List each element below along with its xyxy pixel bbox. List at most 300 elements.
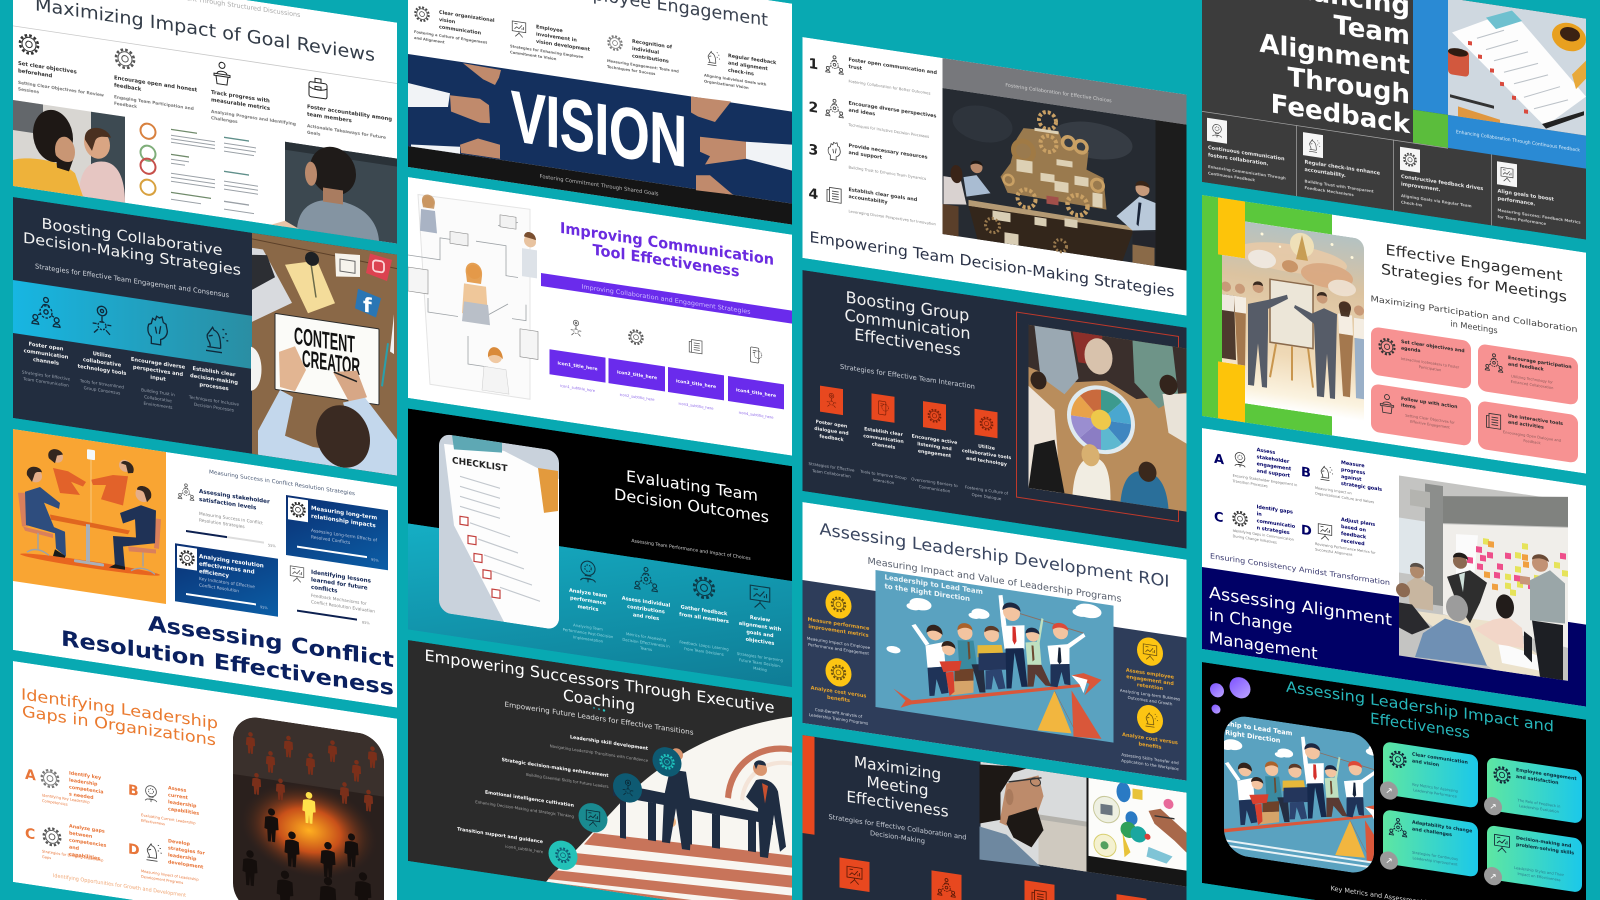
panel: Boosting Group Communication Effectiveness [802,270,1186,549]
column subtitles: Overcoming Barriers to [911,476,958,488]
box titles: icon4_title_here [736,387,776,399]
item B: Evaluating Current Leadership [141,813,196,825]
item C: Identify gaps [1257,504,1293,516]
column subtitles [22,370,239,412]
item A: Ensuring Stakeholder Engagement in [1233,474,1297,487]
item C: Identifying Gaps in Communication [1233,529,1294,542]
step subtitles: Enhancing Decision-Making and Strategic Thinking [475,799,575,819]
panel: Identifying Leadership Gaps [13,661,397,900]
column subtitles: Environments [144,401,172,410]
title: Feedback [1271,89,1411,140]
subtitle: Strategies for Effective Team Interaction [840,363,975,391]
teal band [13,280,252,369]
item 1 [18,34,104,96]
item D: received [1341,538,1365,547]
column titles: processes [199,382,229,392]
left metric 1: improvement metrics [808,624,869,639]
item A: leadership [69,777,98,788]
item 4 [704,49,777,94]
item 2 [114,48,197,110]
column subtitles: Feedback Loops: Learning [679,639,729,652]
pink card 2 [1478,343,1578,405]
item 2 [510,20,590,60]
title: Empowering Successors Through Executive [424,647,775,717]
colour blocks [1202,195,1332,435]
item C: Gaps [42,855,51,860]
column titles: communication [24,348,69,361]
column titles: Establish clear [193,366,236,378]
item A: Transition Processes [1232,479,1268,488]
item 4: Organizational Vision [704,79,749,90]
pink card 4: Encouraging Open Dialogue and [1503,430,1561,443]
title: Tool Effectiveness [593,241,740,281]
title: Maximizing [854,753,941,784]
icon tiles [1207,118,1517,187]
item 2: involvement in [536,32,577,44]
illustration: executives on stairs [546,680,792,900]
sketch: workflow of people [408,191,538,400]
tile: resolution effectiveness [175,543,278,617]
photo: festive team with easel [1221,218,1364,421]
list item 3: 3 [809,142,818,159]
purple band [541,273,792,324]
item 3: Recognition of [632,39,673,51]
column subtitles: Fostering a Culture of [965,484,1009,496]
title: Assessing Alignment [1209,583,1393,630]
title: Resolution Effectiveness [61,625,394,700]
left metric 2: benefits [827,695,850,704]
item D: based on [1341,524,1367,534]
column titles: input [150,375,166,383]
step labels: Transition support and guidance [457,826,543,845]
title: Alignment [1259,29,1410,81]
column subtitles: Interaction [873,477,895,485]
tile: stakeholder satisfaction: Measuring Success in Conflict [199,511,263,527]
item 3: Analyzing Progress and Identifying [211,109,296,127]
column subtitles: Future Team Decision- [739,657,782,669]
right metric 1: Outcomes and Growth [1128,695,1173,707]
item 3: measurable metrics [211,97,270,112]
photo: checklist with coffee [1448,0,1586,136]
pink card 4: Use interactive tools [1508,413,1563,427]
left metric 2: Analyze cost versus [811,685,866,700]
list item 1: Fostering Collaboration for Better Outcomes [848,79,930,96]
column titles: Utilize [978,443,995,452]
step subtitles: icon4_subtitle_here [505,844,544,854]
item D: development [168,859,204,871]
separators [1202,111,1492,225]
chart: ring list [140,123,258,215]
item 4: check-ins [728,68,754,77]
tile: lessons learned [290,566,375,626]
red strip [802,735,814,835]
list item 3: Building Trust to Enhance Team Dynamics [848,165,926,181]
pink card 1 [1371,326,1471,389]
list item 4: 4 [809,186,818,203]
title: Assessing Leadership Impact and [1286,678,1554,736]
column subtitles: Implementation [573,634,604,644]
item 4: Aligning Individual Goals with [704,73,767,87]
list item 4: accountability [848,194,888,206]
pink card 3 [1371,383,1471,446]
item D: Development Programs [141,875,183,885]
pink card 4 [1478,400,1578,463]
item B: strategic goals [1341,481,1382,493]
item C: communicatio [1257,518,1296,530]
panel: Assessing Alignment in Change Management [1202,428,1586,707]
right metric 2: Analyze cost versus [1122,732,1178,746]
box subtitles: icon4_subtitle_here [739,411,774,420]
column titles: Gather feedback [681,604,728,617]
item D: strategies for [168,845,205,857]
panel: Maximizing Impact of Goal Reviews [13,0,397,244]
step labels: Strategic decision-making enhancement [502,757,609,779]
item 4: Foster accountability among [307,104,392,123]
column subtitles: Strategies for Improving [737,651,784,663]
right metric 2 [1121,701,1179,772]
item C: C [25,826,35,843]
column subtitles: from Team Decisions [684,646,724,657]
list item 4: Establish clear goals and [848,187,918,203]
card: decision-making: ↗ [1489,872,1497,883]
item B: Measuring Impact on [1315,486,1352,495]
illustration caption: Leadership to Lead Team [884,572,983,596]
photo: vision banner with hands [408,53,792,225]
item C [1214,498,1296,548]
item 1: communication [439,24,482,37]
navy lower area [1202,567,1586,707]
item 3: Track progress with [211,90,270,105]
item 3 [607,35,678,75]
column subtitles: Decision Processes [194,402,234,413]
column subtitles: Building Trust with Transparent [1305,178,1374,194]
column subtitles: Enhancing Communication Through [1208,164,1286,181]
photo: crowd with glowing leader [233,714,384,900]
column titles [1208,145,1554,210]
illustration: team on arrow: Leadership to Lead Team [1201,716,1293,738]
right metric 2: benefits [1139,741,1161,751]
title: Boosting Group [846,288,969,325]
item A: engagement [1257,461,1292,472]
item B: progress [1341,467,1365,476]
item 4 [307,78,392,139]
illustration: four people at table [13,429,166,604]
title: Meeting [866,773,929,800]
tile: resolution effectiveness: Analyzing resolution [199,554,264,570]
item A: and support [1257,468,1291,479]
pink card 3: Follow up with action [1401,396,1458,410]
title: Decision Outcomes [614,485,769,527]
pink card 1: Interactive Icebreakers to Foster [1401,357,1460,370]
card: adaptability: ↗ [1385,856,1393,867]
title: Empowering Team Decision-Making Strategies [810,228,1175,301]
column subtitles: Building Trust in [141,387,175,397]
title: Team [1334,10,1410,52]
column subtitles: Team Communication [22,376,69,388]
icons [580,558,770,610]
item B: against [1341,474,1362,483]
card: adaptability: Adaptability to change [1412,820,1472,835]
panel: Evaluating Team Decision Outcomes [408,408,792,687]
left metric 1: Performance and Engagement [808,642,869,656]
panel: Employee Engagement vision [392,0,792,225]
panel: Improving Communication Tool Effectiveness [408,177,792,456]
banner word: VISION [511,76,687,183]
column titles: performance. [1498,196,1535,207]
pink card 3: Effective Engagement [1410,420,1450,430]
item 3: Techniques for Success [607,65,656,76]
title: in Change [1209,605,1292,637]
card: adaptability [1380,809,1478,883]
title: Effective Engagement [1386,242,1563,285]
list item 1 [808,51,937,97]
colour blocks [1413,0,1586,169]
title: Decision-Making Strategies [23,230,241,279]
photo: content creator desk: f [363,293,372,318]
title: Effectiveness [846,788,949,821]
tile: long-term relationship: 95% [371,558,379,563]
column subtitles: Metrics for Assessing [626,631,667,642]
item 1: Set clear objectives [18,61,77,76]
item C: and [69,844,80,852]
item C: Analyze gaps [69,823,105,835]
photo: bearded man at whiteboard [980,760,1186,891]
column subtitles [563,621,784,675]
item B: Organizational Culture and Values [1315,491,1374,504]
progress dots [593,707,605,712]
pink card 1: Participation [1419,365,1441,372]
left metric 2: Cost-Benefit Analysis of [815,707,863,719]
item 1: Fostering a Culture of Engagement [414,30,487,45]
card: decision-making: Leadership Styles and Their [1514,866,1564,877]
item D: Develop [168,838,190,848]
item B: Effectiveness [141,819,165,826]
item A: A [1214,452,1225,468]
photo: gears sculpture and workers [942,88,1186,271]
item 2: Engaging Team Participation and [114,94,194,112]
item A [25,769,104,806]
subtitle: in Meetings [1450,318,1498,335]
band caption: Fostering Collaboration for Effective Choices [1005,82,1112,104]
column titles: Establish clear [864,426,904,438]
right metric 1: Analyzing Long-term Business [1120,688,1180,702]
item D [1301,511,1376,561]
column subtitles: Group Consensus [84,385,120,396]
panel: Effective Engagement Strategies for Meetings [1202,195,1586,474]
column titles: from all members [679,612,729,625]
item D: D [128,841,140,859]
subtitle: Maximizing Participation and Collaboration [1370,293,1578,334]
item 1: and Alignment [414,36,445,45]
step subtitles [475,732,649,870]
icon row [32,295,227,355]
panel: Enhancing Team Alignment Through Feedback [1202,0,1586,240]
column subtitles: Performance Post-Decision [563,627,614,639]
item 4: team members [307,112,352,124]
item 1: Clear organizational [439,10,495,24]
item D: Adjust plans [1341,517,1375,528]
column subtitles: Tools for Streamlined [79,378,124,390]
title: Assessing Leadership Development ROI [820,520,1170,591]
tile: lessons learned: Conflict Resolution Evaluation [311,599,375,615]
column subtitles: Tools to Improve Group [859,469,907,481]
item 2: Encourage open and honest [114,75,198,94]
step labels [457,717,649,861]
tile: long-term relationship: Assessing Long-term Effects of [311,528,378,544]
tile: lessons learned: Feedback Mechanisms for [311,593,367,607]
right metric 2: Assessing Skills Transfer and [1121,752,1179,765]
list item 2: and ideas [848,107,875,117]
right metric 1: retention [1137,682,1164,692]
icon tiles [840,853,1146,900]
right metric 1 [1120,633,1180,708]
notebook text: CONTENT [294,323,355,359]
column titles: collaborative [83,357,122,369]
column titles: Constructive feedback drives [1401,174,1483,192]
card: adaptability: and challenges [1412,826,1452,838]
item 1 [414,6,494,44]
column subtitles: Collaborative [144,394,172,403]
column titles [24,341,238,394]
list item 3: and support [848,150,883,161]
box titles: icon2_title_here [617,369,657,381]
column titles: channels [872,441,895,451]
item C: capabilities [69,851,100,862]
tile: stakeholder satisfaction [178,483,276,549]
item A: A [25,767,36,784]
band caption: Improving Collaboration and Engagement Strategies [582,284,750,316]
item 2: feedback [114,83,142,93]
subtitle: Measuring Impact and Value of Leadership Programs [868,556,1122,605]
column titles: metrics [577,604,599,613]
column titles: accountability. [1305,167,1346,179]
right metric 1: Assess employee [1126,668,1175,681]
title: Through [1288,62,1410,111]
tile: long-term relationship: relationship impacts [311,514,376,529]
right metric 1: engagement and [1126,674,1174,687]
list item 1: Foster open communication and [848,57,937,76]
item A: Competencies [42,799,68,807]
column titles [814,419,1011,468]
item 4: Regular feedback [728,53,777,66]
column subtitles: Continuous Feedback [1208,170,1255,182]
item 4: and alignment [728,60,768,72]
column titles: improvement. [1401,181,1441,193]
item C: Strategies for Bridging Leadership [42,849,104,863]
title: Strategies for Meetings [1381,261,1567,306]
item C: in [1257,511,1262,518]
column titles: Foster open [29,341,64,353]
item D [129,838,205,884]
card: clear communication: Key Metrics for Assessing [1412,783,1458,793]
item D: leadership [168,852,197,863]
pink card 2: Utilizing Technology for [1511,374,1553,385]
item A: Assess [1257,447,1275,456]
item B: Assess [168,785,186,794]
pink card 1: Set clear objectives and [1401,339,1465,354]
column subtitles: Strategies for Effective [22,369,70,382]
card: clear communication [1380,741,1478,813]
column titles: and roles [633,612,659,622]
column titles: collaborative tools [962,448,1011,461]
card: decision-making: Decision-making and [1516,835,1571,849]
left metric 1: Measuring Impact on Employee [807,636,871,650]
tile: long-term relationship: Measuring long-term [311,506,377,522]
column subtitles: Aligning Goals via Regular Team [1401,193,1472,208]
column subtitles: Team Collaboration [811,468,851,479]
column titles: technology tools [78,364,126,377]
card: clear communication: Leadership Performance [1413,788,1458,799]
card: employee engagement [1484,756,1582,828]
card: employee engagement: The Role of Feedback in [1517,798,1560,809]
pink card 2: Enhanced Collaboration [1511,380,1553,390]
card: clear communication: Clear communication [1412,752,1468,766]
column titles: channels [33,357,59,367]
card: employee engagement: and satisfaction [1516,774,1559,786]
list item 2: Techniques for Inclusive Decision Processes [848,123,929,139]
purple boxes [550,349,784,409]
item 2: Employee [536,24,563,34]
tile: resolution effectiveness: effectiveness and [199,561,255,576]
item 2: Feedback [114,101,137,110]
tile: resolution effectiveness: Key Indicators of Effective [199,576,255,590]
photo: checklist: CHECKLIST [452,456,508,475]
box subtitles: icon1_subtitle_here [560,384,596,393]
list item 4: Leveraging Diverse Perspectives for Innovation [848,209,936,227]
tile: resolution effectiveness: Conflict Resolution [199,582,239,594]
title: Gaps in Organizations [22,702,216,749]
card: employee engagement: ↗ [1489,802,1497,813]
left metric 2 [809,654,868,726]
column titles: engagement [918,448,952,459]
item D: feedback [1341,531,1367,541]
column subtitles: Feedback Mechanisms [1305,185,1354,197]
card: decision-making: Impact on Effectiveness [1517,872,1561,882]
box titles: icon3_title_here [676,378,716,390]
icons [571,320,762,364]
item B: current [168,792,189,801]
step subtitles: Building Essential Skills for Future Leaders [526,772,609,789]
title: Evaluating Team [626,467,758,505]
column subtitles: Analyzing Team [573,622,603,632]
item 4: Actionable Takeaways for Future [307,123,386,141]
teal lower area [408,524,792,687]
column titles: and technology [966,456,1007,468]
photo: content creator desk: CREATOR [302,345,360,381]
decorative purple circles [1210,673,1250,719]
subtitle: Assessing Team Performance and Impact of Choices [631,538,751,562]
item 2: Strategies for Enhancing Employee [510,44,584,59]
item D: Reviewing Performance Metrics for [1315,542,1376,555]
item C: C [1214,510,1224,526]
tile: long-term relationship [286,495,388,570]
pink card 2: and feedback [1508,361,1545,373]
right metric 2: Application to the Workplace [1121,758,1179,772]
column subtitles: Check-Ins [1401,199,1423,208]
column titles: goals and [746,629,774,639]
column titles: contributions [627,604,665,616]
column titles: Align goals to boost [1498,188,1554,203]
step subtitles: Navigating Leadership Transitions with Confidence [550,743,649,763]
panel: Maximizing Meeting Effectiveness [802,733,1186,900]
column titles: Encourage active [912,433,957,446]
item C: n strategies [1257,525,1290,536]
left metric 1 [807,586,871,656]
column subtitles [1208,164,1581,231]
item C: During Change Initiatives [1233,534,1277,545]
card: clear communication: and vision [1412,758,1439,768]
card: decision-making [1484,824,1582,898]
